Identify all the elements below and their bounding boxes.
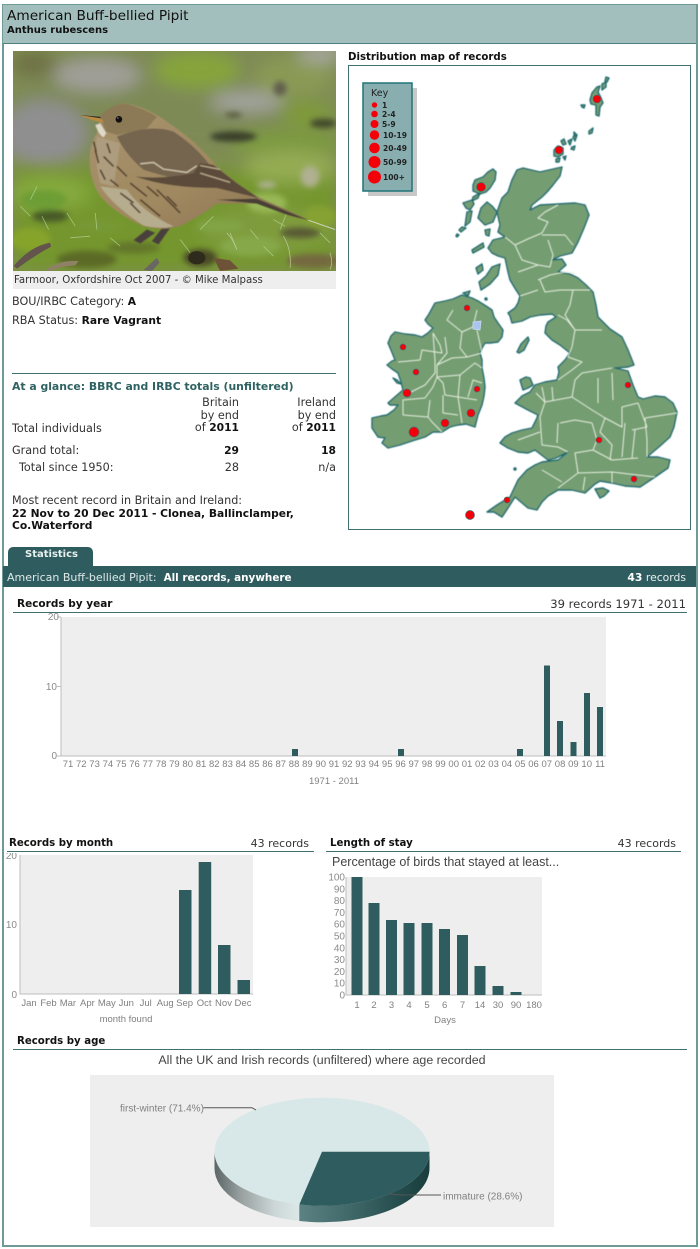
county boundaries: [398, 205, 677, 490]
pie chart: records by age: first-winter (71.4%): [120, 1104, 204, 1114]
bar chart: length of stay: 6: [442, 1000, 447, 1011]
bar chart: length of stay: 1: [354, 1000, 360, 1011]
bar chart: length of stay: 70: [334, 908, 345, 919]
bar chart: records by year: 06: [528, 759, 539, 770]
bar chart: records by year: 87: [276, 759, 286, 770]
bar chart: records by year: 84: [236, 759, 246, 770]
most recent record: [12, 494, 294, 532]
bar chart: length of stay: 2: [371, 1000, 377, 1011]
bar chart: records by month: Dec: [235, 998, 252, 1009]
bar chart: records by year: 83: [222, 759, 233, 770]
heading: records by year: Records by year: [17, 598, 112, 610]
bar chart: records by year: 10: [581, 759, 592, 770]
bar chart: records by year: 04: [502, 759, 512, 770]
column: Ireland: [292, 396, 336, 434]
bar chart: records by year: [46, 612, 606, 787]
bar chart: records by year: 94: [369, 759, 379, 770]
column: Ireland: by end: [298, 408, 336, 422]
column: Britain: by end: [201, 408, 239, 422]
row label: total since 1950: Total since 1950:: [19, 461, 114, 474]
photo caption: [13, 271, 336, 289]
bar chart: records by month: Sep: [176, 998, 193, 1009]
bar chart: length of stay: 180: [526, 1000, 542, 1011]
row label: total individuals: Total individuals: [12, 422, 102, 435]
stay subtitle: Percentage of birds that stayed at least...: [332, 855, 559, 869]
bar chart: records by year: 88: [289, 759, 299, 770]
statistics tab: [8, 547, 93, 566]
BOU category: BOU/IRBC Category: A: [12, 295, 136, 308]
column: Britain: Britain: [202, 396, 239, 409]
bar chart: records by month: Feb: [40, 998, 57, 1009]
bar chart: length of stay: 5: [424, 1000, 430, 1011]
bar chart: length of stay: 80: [334, 896, 345, 907]
bar chart: records by month: Jan: [21, 998, 37, 1009]
at a glance heading: At a glance: BBRC and IRBC totals (unfiltered): [12, 380, 294, 393]
bar chart: records by year: 92: [342, 759, 353, 770]
pie chart: records by age: [90, 1075, 554, 1227]
caption text: Farmoor, Oxfordshire Oct 2007 - © Mike Malpass: [14, 275, 263, 286]
bar chart: length of stay: 4: [406, 1000, 412, 1011]
filter description: American Buff-bellied Pipit: All records, anywhere: [7, 571, 292, 584]
bar chart: records by year: 86: [262, 759, 273, 770]
map key: 20-49: [383, 144, 407, 153]
row label: grand total: Grand total:: [12, 444, 79, 457]
most recent record: Co.Waterford: [12, 519, 92, 532]
bar chart: length of stay: Days: [434, 1015, 456, 1026]
Ireland since 1950: n/a: [318, 461, 336, 474]
RBA status: RBA Status: Rare Vagrant: [12, 314, 161, 327]
statistics bar: [3, 566, 696, 587]
record count: 43 records: [627, 571, 686, 584]
map key: 5-9: [382, 120, 396, 129]
bar chart: records by year: 96: [395, 759, 406, 770]
bar chart: records by month: May: [98, 998, 116, 1009]
bar chart: records by year: 10: [46, 682, 57, 693]
bird photograph: [13, 51, 336, 271]
bar chart: length of stay: 3: [389, 1000, 394, 1011]
bar chart: records by month: Mar: [60, 998, 76, 1009]
column: Britain: [195, 396, 239, 434]
species name: American Buff-bellied Pipit: [7, 8, 189, 24]
bar chart: records by year: 72: [76, 759, 87, 770]
map heading: Distribution map of records: [348, 52, 507, 63]
heading: length of stay: Length of stay: [330, 838, 413, 849]
bar chart: records by year: 1971 - 2011: [309, 776, 359, 787]
bar chart: records by year: 0: [51, 751, 57, 762]
bar chart: records by year: 90: [315, 759, 326, 770]
map key: Key: [371, 88, 389, 99]
scientific name: Anthus rubescens: [7, 25, 108, 36]
bar chart: records by month: Jun: [119, 998, 134, 1009]
bar chart: length of stay: 14: [475, 1000, 485, 1011]
bar chart: records by year: 89: [302, 759, 313, 770]
bar chart: records by year: 02: [475, 759, 486, 770]
column: Britain: of 2011: [195, 421, 239, 434]
year count: 39 records 1971 - 2011: [550, 597, 686, 611]
bar chart: length of stay: 90: [334, 884, 345, 895]
bar chart: records by year: 99: [435, 759, 446, 770]
bar chart: records by year: 71: [63, 759, 73, 770]
bar chart: records by year: 77: [143, 759, 153, 770]
bar chart: records by year: 09: [568, 759, 579, 770]
most recent record: Most recent record in Britain and Ireland:: [12, 494, 242, 507]
bar chart: records by month: Nov: [215, 998, 232, 1009]
bar chart: records by year: 76: [129, 759, 140, 770]
bar chart: records by month: 0: [11, 990, 17, 1001]
bar chart: records by year: 05: [515, 759, 525, 770]
bar chart: records by month: 10: [6, 920, 17, 931]
bar chart: records by year: 07: [542, 759, 552, 770]
column: Ireland: Ireland: [297, 396, 336, 409]
bar chart: records by year: 82: [209, 759, 220, 770]
bar chart: records by year: 91: [329, 759, 339, 770]
heading: records by month: Records by month: [9, 838, 113, 849]
bar chart: length of stay: 60: [334, 920, 345, 931]
most recent record: 22 Nov to 20 Dec 2011 - Clonea, Ballinclamper,: [12, 506, 294, 520]
record dots: [400, 95, 637, 520]
map key: [363, 83, 417, 196]
bar chart: length of stay: 50: [334, 932, 345, 942]
header band: [3, 5, 696, 44]
bar chart: length of stay: 10: [334, 979, 345, 990]
Lough Neagh: [473, 321, 481, 330]
bar chart: records by year: 03: [488, 759, 499, 770]
bar chart: records by year: 80: [182, 759, 193, 770]
map key: 1: [382, 101, 387, 110]
bar chart: records by month: Jul: [140, 998, 152, 1009]
bar chart: records by month: month found: [100, 1014, 152, 1025]
map key: 50-99: [383, 158, 407, 167]
bar chart: records by year: 97: [409, 759, 419, 770]
bar chart: records by year: 81: [196, 759, 206, 770]
bar chart: length of stay: 30: [334, 955, 345, 966]
bar chart: records by month: Aug: [157, 998, 174, 1009]
bar chart: records by year: 85: [249, 759, 259, 770]
bar chart: records by year: 74: [103, 759, 113, 770]
pie chart: records by age: immature (28.6%): [443, 1192, 522, 1202]
panel: at a glance: [12, 373, 336, 476]
Ireland grand total: 18: [321, 444, 336, 457]
bar chart: records by month: Oct: [197, 998, 212, 1009]
bar chart: records by year: 20: [48, 612, 59, 623]
bar chart: records by month: Apr: [80, 998, 95, 1009]
bar chart: records by month: [6, 853, 253, 1025]
month count: 43 records: [251, 837, 309, 850]
bar chart: records by year: 73: [89, 759, 100, 770]
bar chart: length of stay: 40: [334, 943, 345, 954]
bar chart: records by year: 01: [462, 759, 472, 770]
bar chart: records by year: 79: [169, 759, 180, 770]
heading: records by age: Records by age: [17, 1036, 105, 1047]
Britain grand total: 29: [224, 444, 239, 457]
bar chart: length of stay: [328, 872, 542, 1026]
stay count: 43 records: [618, 837, 676, 850]
bar chart: records by year: 93: [355, 759, 366, 770]
bar chart: length of stay: 30: [493, 1000, 503, 1011]
column: Ireland: of 2011: [292, 421, 336, 434]
bar chart: length of stay: 100: [328, 872, 345, 884]
Britain since 1950: 28: [225, 461, 239, 474]
bar chart: records by year: 11: [595, 759, 605, 770]
bar chart: records by year: 98: [422, 759, 432, 770]
distribution map: [348, 65, 691, 530]
bar chart: length of stay: 0: [339, 990, 345, 1002]
age subtitle: All the UK and Irish records (unfiltered) where age recorded: [158, 1053, 486, 1067]
land masses: [372, 77, 677, 517]
bar chart: length of stay: 20: [334, 967, 345, 978]
bar chart: length of stay: 7: [460, 1000, 465, 1011]
tab label: Statistics: [25, 549, 78, 560]
map key: 10-19: [383, 131, 407, 140]
bar chart: records by year: 95: [382, 759, 392, 770]
bar chart: records by year: 00: [448, 759, 459, 770]
bar chart: records by year: 08: [555, 759, 565, 770]
map key: 100+: [383, 173, 405, 182]
bar chart: records by year: 78: [156, 759, 166, 770]
bar chart: length of stay: 90: [511, 1000, 521, 1011]
map key: 2-4: [382, 110, 396, 119]
bar chart: records by year: 75: [116, 759, 126, 770]
